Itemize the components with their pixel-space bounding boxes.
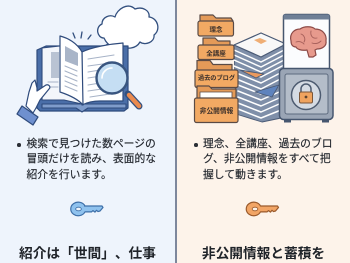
illustration: folders, document stack, brain window and safe [194, 14, 334, 124]
icon: blue key [70, 202, 104, 216]
icon: brain window [284, 14, 330, 72]
bullet text: 検索で見つけた数ページの [26, 138, 156, 150]
icon: folder 非公開情報: 非公開情報 [200, 106, 234, 115]
icon: open book [37, 32, 128, 112]
illustration: book, magnifier, hand and thought bubble [16, 5, 158, 126]
bullet text: 冒頭だけを読み、表面的な [26, 153, 156, 165]
icon: thought bubble [98, 6, 158, 56]
bullet text: 理念、全講座、過去のブロ [203, 138, 333, 150]
icon: folder 全講座: 全講座 [206, 48, 226, 58]
icon: orange key [246, 202, 280, 216]
panel: left [0, 0, 175, 263]
bullet text: グ、非公開情報をすべて把 [203, 153, 331, 165]
bullet text [17, 138, 156, 181]
divider [175, 0, 177, 263]
icon: locked safe [280, 68, 333, 122]
icon: document stack [234, 33, 286, 122]
icon: folder 理念: 理念 [210, 24, 223, 34]
panel: right [177, 0, 350, 263]
icon: folder 過去のブログ: 過去のブログ [198, 74, 236, 82]
heading: 紹介は「世間」、仕事 [19, 246, 156, 261]
icon: magnifying glass [96, 62, 139, 106]
bullet text: 紹介を行います。 [26, 169, 112, 181]
icon: hand [17, 80, 50, 125]
bullet text: 握して動きます。 [203, 169, 288, 181]
bullet text [194, 138, 333, 181]
heading: 非公開情報と蓄積を [202, 246, 325, 261]
